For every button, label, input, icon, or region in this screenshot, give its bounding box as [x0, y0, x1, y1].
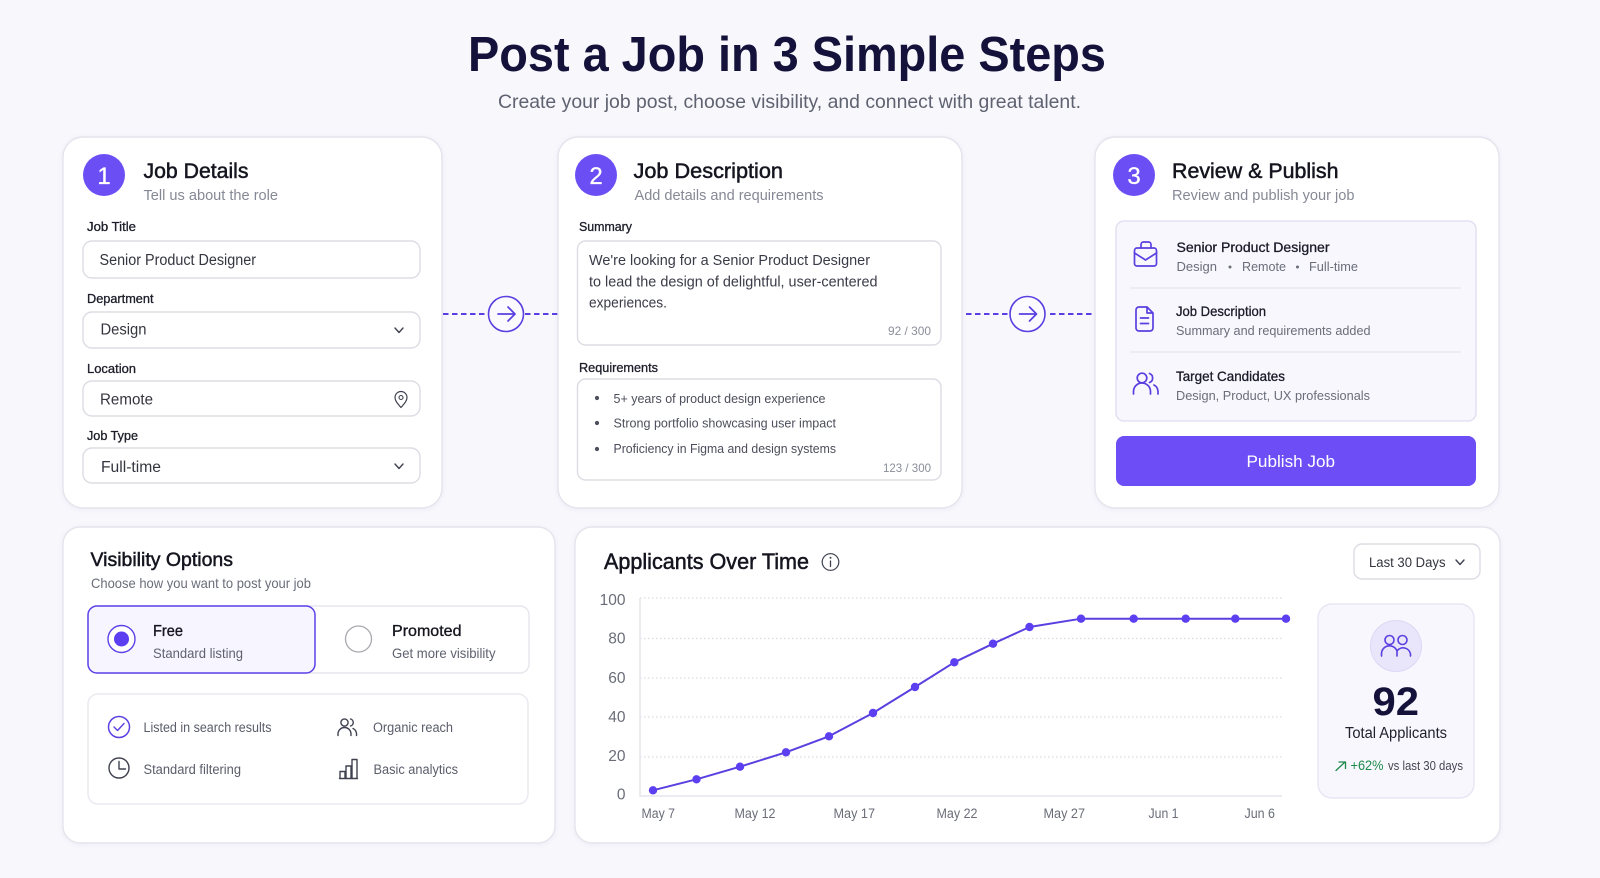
- feature: basic analytics: [340, 760, 458, 778]
- feature: organic reach: Organic reach: [373, 720, 453, 735]
- field: summary: 92 / 300: [888, 324, 931, 338]
- dropdown: last 30 days: [1354, 544, 1480, 579]
- step number 1: 1: [97, 163, 111, 190]
- step number 3: [1113, 154, 1155, 196]
- button: publish job: Publish Job: [1246, 452, 1335, 471]
- field: location: [83, 362, 420, 416]
- icon: briefcase: [1134, 242, 1156, 266]
- field: summary: Summary: [579, 220, 633, 234]
- x axis labels: May 27: [1044, 806, 1085, 821]
- field: requirements: 123 / 300: [883, 461, 931, 475]
- field: summary: to lead the design of delightful, user-centered: [589, 274, 878, 290]
- title: Post a Job in 3 Simple Steps: [468, 28, 1106, 82]
- field: requirements: Proficiency in Figma and design systems: [614, 441, 836, 456]
- x axis labels: May 12: [734, 806, 776, 821]
- x axis labels: May 17: [834, 806, 875, 821]
- data points: [649, 614, 1290, 794]
- field: summary: We're looking for a Senior Product Designer: [589, 253, 870, 269]
- heading: job description: Job Description: [634, 159, 783, 183]
- arrow: step 1 to step 2: [443, 296, 558, 332]
- field: requirements: 5+ years of product design experience: [614, 391, 826, 406]
- x axis labels: Jun 6: [1244, 806, 1275, 821]
- step 1 subheading: Tell us about the role: [144, 187, 278, 204]
- x axis labels: [642, 806, 1275, 821]
- stat card: total applicants: [1318, 604, 1474, 798]
- review row: target candidates: [1134, 368, 1370, 403]
- option: promoted: Promoted: [392, 623, 462, 640]
- y axis labels: [600, 592, 626, 804]
- step number 2: 2: [589, 163, 603, 190]
- panel: visibility options: [63, 527, 555, 843]
- x axis labels: Jun 1: [1148, 806, 1178, 821]
- y axis labels: 100: [600, 592, 626, 609]
- panel: step 2 job description: [558, 137, 962, 508]
- field: job type: Job Type: [87, 429, 138, 443]
- panel: applicants over time: [575, 527, 1500, 843]
- review row: job description: Summary and requirements added: [1176, 323, 1370, 338]
- feature: standard filtering: Standard filtering: [144, 762, 241, 777]
- icon: people: [1134, 373, 1158, 394]
- feature: listed in search results: Listed in search results: [144, 720, 272, 735]
- y axis labels: 60: [608, 670, 626, 687]
- x axis labels: May 7: [642, 806, 675, 821]
- field: requirements: Requirements: [579, 361, 658, 375]
- review summary box: [1116, 221, 1476, 421]
- field: job title: Senior Product Designer: [100, 252, 256, 269]
- subtitle: Create your job post, choose visibility, and connect with great talent.: [498, 91, 1081, 113]
- review row: job title: Design: [1176, 259, 1217, 274]
- field: requirements: [578, 361, 941, 480]
- heading: job details: Job Details: [144, 159, 248, 183]
- y axis labels: 40: [608, 709, 626, 726]
- icon: map pin: [395, 392, 407, 408]
- field: location: Remote: [100, 392, 153, 408]
- x axis labels: May 22: [936, 806, 978, 821]
- step 2 subheading: Add details and requirements: [634, 187, 824, 204]
- field: department: Design: [100, 322, 146, 338]
- option: free: [88, 606, 315, 673]
- field: location: Location: [87, 362, 136, 376]
- y axis labels: 20: [608, 748, 626, 765]
- icon: info: [822, 554, 839, 570]
- button: publish job: [1116, 436, 1476, 486]
- heading: applicants over time: Applicants Over Time: [604, 549, 809, 574]
- feature: standard filtering: [109, 758, 241, 778]
- icon: document: [1136, 307, 1153, 331]
- trend: vs last 30 days: [1388, 759, 1463, 773]
- option: free: Free: [153, 623, 183, 640]
- option: promoted: Get more visibility: [392, 645, 496, 661]
- option selector: [88, 606, 529, 673]
- stat label: Total Applicants: [1345, 725, 1447, 742]
- panel: step 1 job details: [63, 137, 442, 508]
- feature list: [88, 694, 528, 804]
- y axis labels: 0: [617, 786, 626, 804]
- field: job type: [83, 429, 420, 483]
- field: job title: [83, 220, 420, 278]
- trend: [1336, 758, 1463, 773]
- review row: job description: Job Description: [1176, 303, 1266, 319]
- icon: people in circle: [1370, 620, 1422, 672]
- visibility subheading: Choose how you want to post your job: [91, 575, 311, 591]
- field: requirements: Strong portfolio showcasing user impact: [614, 416, 836, 430]
- step number 1: [83, 154, 125, 196]
- line chart: [600, 592, 1290, 821]
- stat value: 92: [1372, 680, 1419, 724]
- review row: job title: Remote: [1242, 259, 1286, 274]
- review row: job title: Full-time: [1309, 259, 1358, 274]
- panel: step 3 review and publish: [1095, 137, 1499, 508]
- field: summary: [578, 220, 941, 345]
- trend: +62%: [1350, 758, 1384, 773]
- field: department: Department: [87, 292, 154, 306]
- review row: job description: [1136, 303, 1370, 338]
- review row: job title: Senior Product Designer: [1176, 239, 1330, 255]
- step number 3: 3: [1127, 163, 1141, 190]
- option: free: Standard listing: [153, 645, 243, 661]
- review row: target candidates: Design, Product, UX professionals: [1176, 388, 1370, 403]
- dropdown: last 30 days: Last 30 Days: [1369, 555, 1446, 570]
- step 3 subheading: Review and publish your job: [1172, 187, 1354, 204]
- feature: listed in search results: [108, 716, 272, 738]
- y axis labels: 80: [608, 630, 626, 648]
- heading: visibility options: Visibility Options: [90, 549, 233, 571]
- field: job title: Job Title: [87, 220, 136, 234]
- review row: target candidates: Target Candidates: [1176, 368, 1285, 384]
- field: summary: experiences.: [589, 296, 667, 312]
- field: job type: Full-time: [101, 459, 161, 476]
- arrow: step 2 to step 3: [966, 296, 1095, 332]
- option: promoted: [346, 623, 496, 661]
- review row: job title: [1134, 239, 1358, 274]
- data line: [653, 619, 1286, 790]
- feature: organic reach: [338, 719, 453, 736]
- step number 2: [575, 154, 617, 196]
- heading: review and publish: Review & Publish: [1172, 159, 1338, 183]
- feature: basic analytics: Basic analytics: [374, 762, 458, 777]
- field: department: [83, 292, 420, 348]
